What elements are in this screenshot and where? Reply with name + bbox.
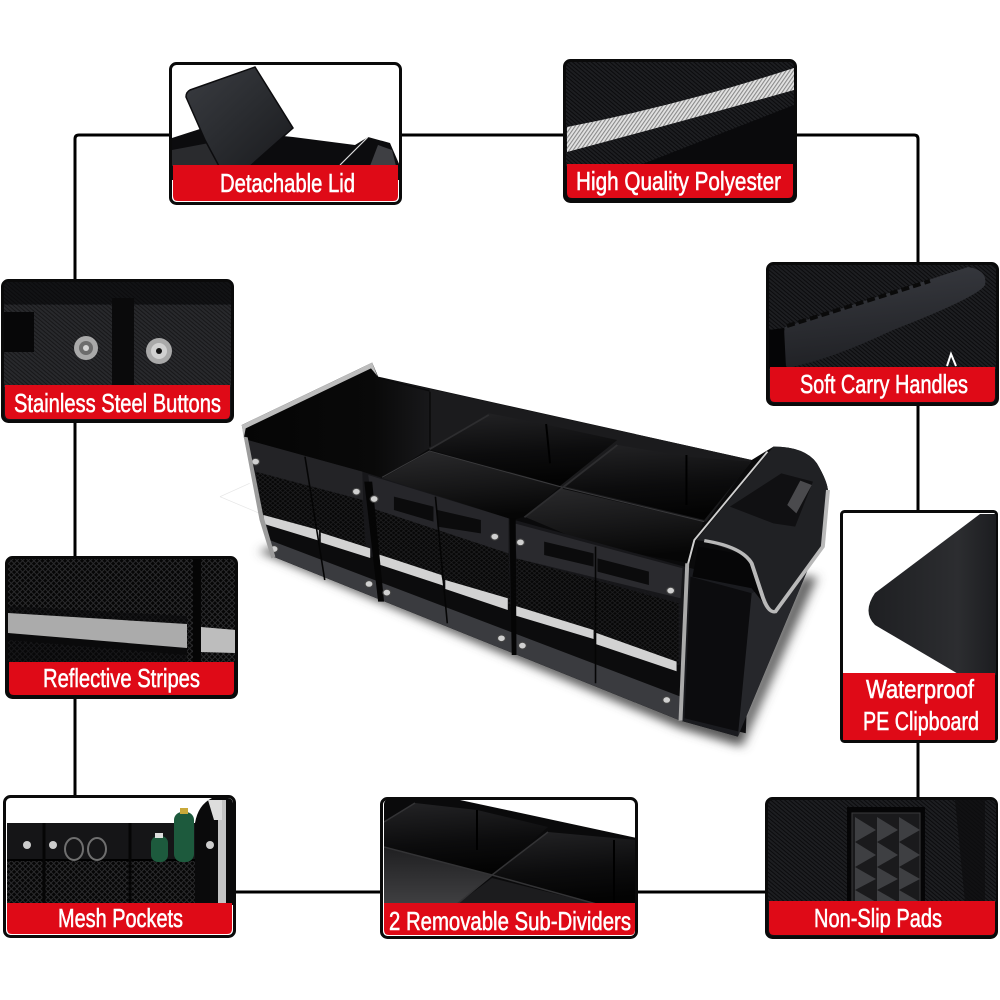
label text: 2 Removable Sub-Dividers xyxy=(389,906,631,936)
panel: reflective stripes xyxy=(6,558,237,698)
label text: Detachable Lid xyxy=(220,168,355,198)
photo: lid raised on organizer xyxy=(172,67,400,180)
label bar xyxy=(5,385,230,419)
rear cells xyxy=(430,413,617,486)
panel: soft carry handles xyxy=(768,264,998,404)
photo: divider cells xyxy=(384,800,637,905)
reflective top trim xyxy=(242,363,377,438)
pocket seams xyxy=(305,457,596,683)
label text: High Quality Polyester xyxy=(576,166,781,196)
sub-divider faces xyxy=(382,452,560,522)
photo: clipboard xyxy=(868,514,996,675)
photo: fabric with reflective trim xyxy=(566,62,794,170)
panel: removable sub-dividers xyxy=(382,798,637,938)
label bar xyxy=(7,903,232,934)
label text: Waterproof xyxy=(866,674,975,704)
mesh pockets xyxy=(256,472,366,553)
panel: high quality polyester xyxy=(564,60,796,202)
top flap xyxy=(248,440,363,500)
label text: Stainless Steel Buttons xyxy=(14,388,221,418)
connector lines xyxy=(75,135,918,892)
panel: stainless steel buttons xyxy=(2,280,232,422)
photo: handle xyxy=(769,265,996,370)
label bar xyxy=(9,662,234,695)
left edge binding xyxy=(244,437,275,558)
label text: Non-Slip Pads xyxy=(814,903,942,933)
label bar xyxy=(770,367,995,402)
faint floor lines xyxy=(220,483,260,513)
right end panel xyxy=(681,563,809,737)
ground shadow xyxy=(260,547,817,747)
panel: non-slip pads xyxy=(766,798,996,938)
photo: tools in pockets xyxy=(7,798,233,905)
photo: snap buttons xyxy=(4,282,231,388)
photo: studded pad xyxy=(768,800,996,912)
rivets xyxy=(252,458,675,703)
label bar xyxy=(384,903,635,935)
label bar xyxy=(843,673,995,740)
back wall xyxy=(378,377,752,522)
panel: detachable lid xyxy=(170,64,400,204)
reflective stripes xyxy=(263,515,677,671)
label bar xyxy=(173,165,398,201)
base silhouette xyxy=(242,363,828,737)
carry handle xyxy=(730,473,813,527)
photo: mesh with stripes xyxy=(8,559,237,663)
label text: Mesh Pockets xyxy=(58,903,183,933)
end pocket flap xyxy=(696,447,828,613)
front face xyxy=(247,440,684,721)
left compartment xyxy=(245,367,430,478)
label text: Reflective Stripes xyxy=(43,663,200,693)
label bar xyxy=(769,901,995,935)
label bar xyxy=(567,164,793,198)
end pocket trim xyxy=(704,490,828,612)
central product: trunk organizer xyxy=(220,363,828,747)
straps xyxy=(364,482,516,655)
panel: mesh pockets xyxy=(4,796,234,936)
panel: waterproof PE clipboard xyxy=(842,512,996,742)
lower grey band xyxy=(267,527,681,721)
velcro patches xyxy=(394,497,649,585)
